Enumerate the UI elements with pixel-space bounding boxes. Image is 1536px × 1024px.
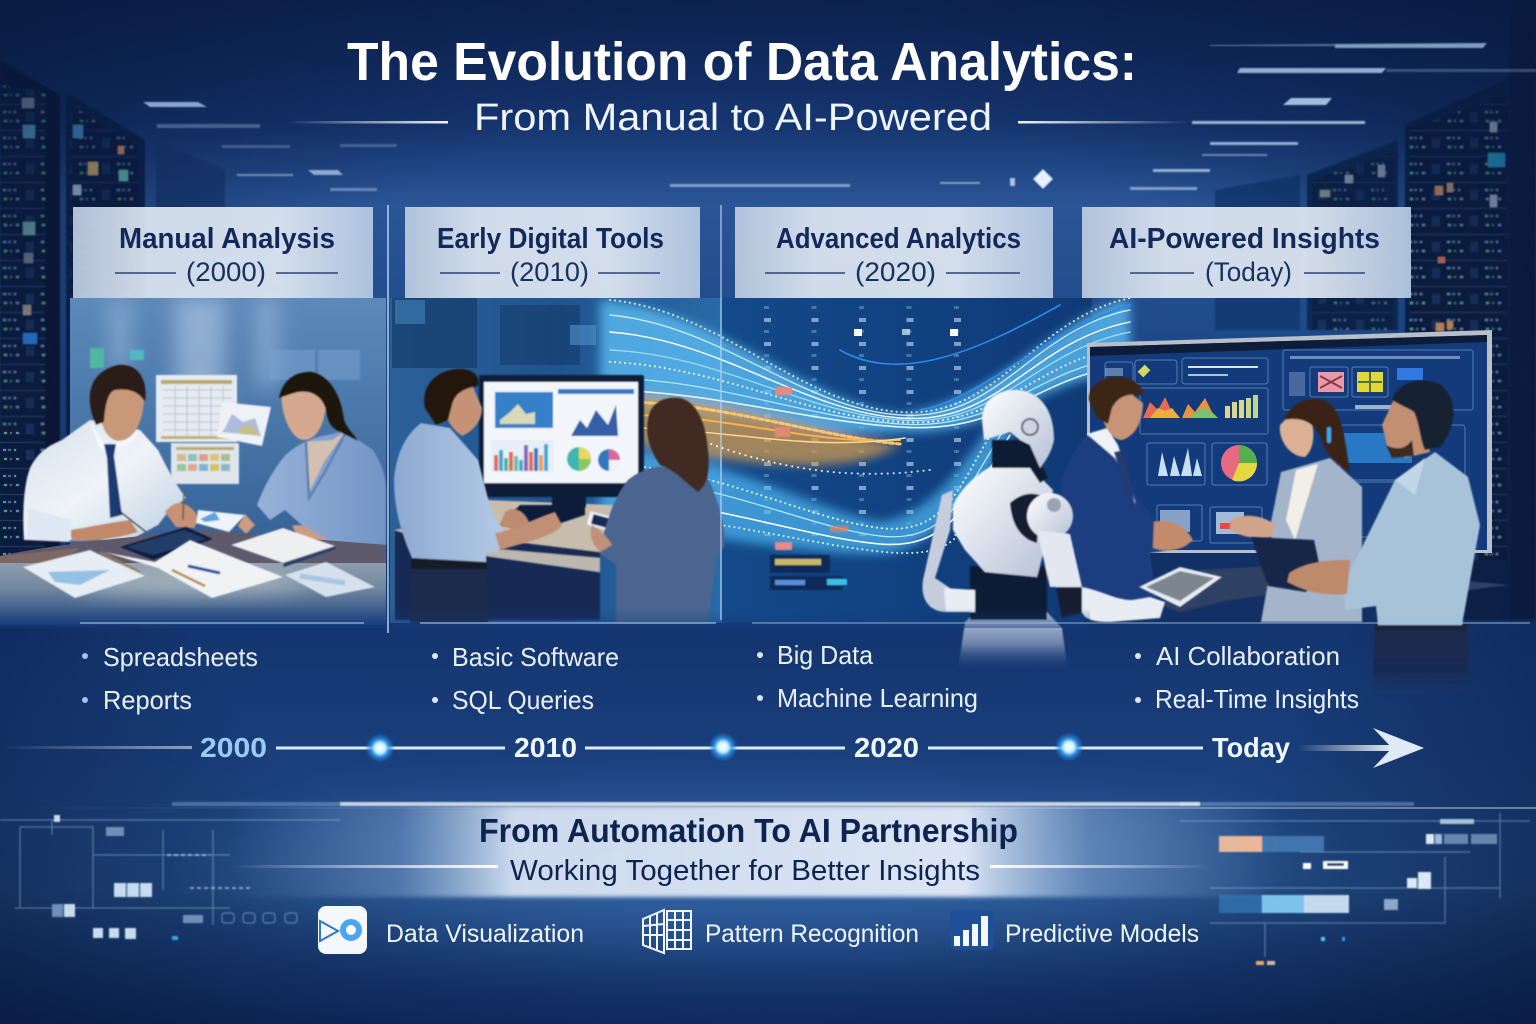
scene backdrop 1	[70, 298, 386, 623]
feature: predictive models	[950, 910, 1199, 950]
timeline arrow	[1297, 728, 1424, 768]
bullets: ai-powered insights: Real-Time Insights	[1155, 684, 1359, 714]
paper stack	[23, 510, 375, 598]
timeline	[0, 728, 1424, 768]
bullets: manual analysis: Spreadsheets	[103, 642, 258, 672]
bullets: early digital tools	[432, 642, 619, 715]
bullets: advanced analytics	[757, 640, 978, 713]
woman from behind	[587, 398, 724, 623]
header card: manual analysis: Manual Analysis	[119, 223, 335, 255]
banner subheading: Working Together for Better Insights	[510, 855, 980, 887]
bullets: advanced analytics: Machine Learning	[777, 683, 978, 713]
banner heading: From Automation To AI Partnership	[479, 812, 1018, 849]
feature: pattern recognition: Pattern Recognition	[705, 920, 919, 948]
header card: early digital tools: Early Digital Tools	[437, 223, 664, 255]
scene backdrop 3	[722, 298, 1092, 623]
light beams	[110, 298, 279, 428]
man standing	[394, 369, 562, 623]
header card: manual analysis: (2000)	[186, 257, 266, 287]
bullets: early digital tools: Basic Software	[452, 642, 619, 672]
monitor	[479, 375, 644, 530]
header card: ai-powered insights: (Today)	[1205, 257, 1292, 287]
bullets: ai-powered insights	[1135, 641, 1359, 714]
feature: predictive models: Predictive Models	[1005, 920, 1199, 948]
timeline labels: 2000	[200, 732, 267, 763]
header card: advanced analytics: Advanced Analytics	[776, 223, 1021, 255]
wall display	[1087, 330, 1492, 553]
timeline labels	[200, 732, 1290, 763]
desk	[394, 500, 613, 620]
header card: advanced analytics	[735, 207, 1053, 298]
display charts	[1105, 356, 1460, 534]
woman in grey jacket	[1230, 399, 1362, 622]
header card: ai-powered insights: AI-Powered Insights	[1109, 223, 1380, 255]
tablet	[1139, 567, 1222, 607]
ceiling light strips	[143, 43, 1536, 191]
desk platform	[1160, 565, 1510, 612]
icon: data visualization	[318, 906, 367, 954]
subtitle rules	[285, 121, 1190, 124]
woman at desk	[238, 372, 386, 545]
feature: data visualization	[318, 906, 584, 954]
robot	[922, 390, 1165, 672]
subtitle: From Manual to AI-Powered	[474, 97, 992, 139]
circuit decoration left	[0, 802, 340, 940]
closing banner	[0, 802, 1536, 897]
folder	[1251, 537, 1320, 592]
server racks left	[0, 60, 225, 620]
stream lines	[610, 298, 1130, 553]
header card: early digital tools	[405, 207, 700, 298]
lower wall	[1085, 540, 1410, 624]
bullets: early digital tools: SQL Queries	[452, 685, 594, 715]
stream glow	[600, 298, 1130, 554]
header card: ai-powered insights	[1082, 207, 1411, 298]
timeline labels: 2010	[514, 732, 577, 763]
server racks right	[1215, 0, 1536, 620]
man in suit	[1062, 377, 1193, 600]
icon: grid	[643, 910, 691, 953]
header card: advanced analytics: (2020)	[855, 257, 936, 287]
timeline nodes	[365, 732, 1084, 763]
pinned sheet calendar	[156, 375, 237, 442]
mini status panels	[770, 387, 848, 590]
title: The Evolution of Data Analytics:	[347, 32, 1137, 92]
timeline labels: Today	[1212, 732, 1290, 763]
panel: ai insights scene	[922, 330, 1510, 700]
panel: advanced analytics background	[600, 298, 1130, 623]
bottom fade of scenes	[0, 608, 1090, 628]
man in light shirt	[1287, 381, 1480, 700]
desk and papers	[0, 510, 386, 625]
pinned sheet chart	[217, 402, 271, 446]
circuit decoration right	[1180, 802, 1530, 965]
bullets: manual analysis: Reports	[103, 685, 192, 715]
bullets: advanced analytics: Big Data	[777, 640, 874, 670]
header card: early digital tools: (2010)	[510, 257, 589, 287]
panel: early digital tools scene	[394, 369, 724, 623]
feature: data visualization: Data Visualization	[386, 920, 584, 948]
status squares	[740, 306, 980, 536]
keyboard	[120, 527, 213, 560]
pinned sheet colour grid	[171, 443, 239, 484]
man at desk	[23, 365, 197, 542]
scene backdrop 2	[390, 298, 722, 623]
header card: manual analysis	[73, 207, 373, 298]
title	[347, 32, 1137, 139]
feature: pattern recognition	[643, 910, 919, 953]
column dividers	[80, 205, 1530, 633]
bullets: manual analysis	[82, 642, 258, 715]
icon: bar chart	[950, 910, 994, 950]
bullets: ai-powered insights: AI Collaboration	[1156, 641, 1340, 671]
timeline labels: 2020	[854, 732, 919, 763]
